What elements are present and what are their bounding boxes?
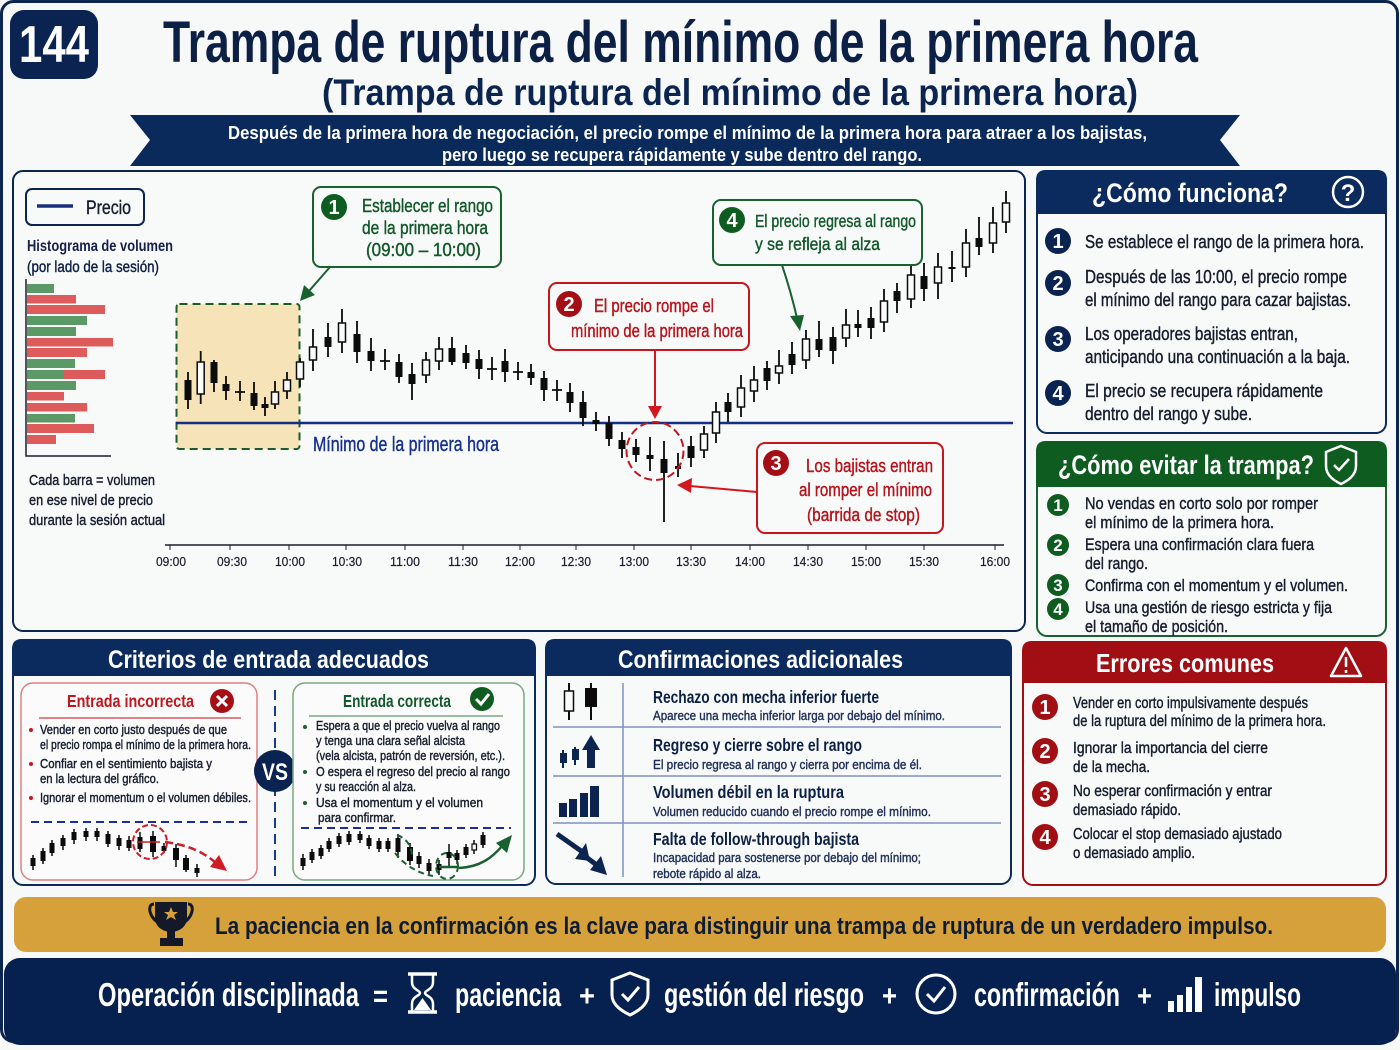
step 2 [1045, 267, 1351, 310]
time axis: 14:00 [735, 554, 765, 569]
volume histogram heading: Histograma de volumen [27, 238, 173, 255]
card heading [309, 687, 503, 716]
card heading: Entrada correcta [343, 691, 451, 711]
callout 1: de la primera hora [362, 218, 489, 238]
bullet list: Vender en corto justo después de que [40, 722, 227, 737]
callout 2: mínimo de la primera hora [571, 321, 744, 341]
footer formula: impulso [1214, 976, 1301, 1013]
tip 2 [1047, 534, 1315, 573]
callout 2: 2 [563, 294, 575, 316]
step 2: el mínimo del rango para cazar bajistas. [1085, 290, 1351, 310]
subtitle: (Trampa de ruptura del mínimo de la primera hora) [322, 71, 1138, 113]
bullet list: y tenga una clara señal alcista [316, 733, 466, 748]
tip 2: 2 [1053, 536, 1063, 555]
time axis: 13:30 [676, 554, 706, 569]
callout 2: El precio rompe el [594, 296, 714, 316]
histogram note [29, 472, 165, 529]
footer formula: + [882, 980, 897, 1013]
mistake 1: Vender en corto impulsivamente después [1073, 695, 1308, 712]
callout 1: Establecer el rango [362, 196, 493, 216]
icon: falling arrow [557, 834, 607, 875]
arrow: callout 4 to rebound [782, 265, 804, 331]
arrow: callout 2 to low line [648, 350, 662, 419]
header: Errores comunes [1096, 648, 1274, 678]
bullet list: Espera a que el precio vuelva al rango [316, 718, 500, 733]
tip 1: No vendas en corto solo por romper [1085, 495, 1318, 513]
callout 4: 4 [726, 210, 738, 232]
step 3: 3 [1052, 329, 1064, 351]
step 1: 1 [1052, 231, 1064, 253]
time axis: 10:00 [275, 554, 305, 569]
header [1022, 641, 1387, 683]
legend: Precio [86, 198, 131, 219]
card: incorrect entry [21, 683, 257, 880]
time axis: 12:00 [505, 554, 535, 569]
header: ¿Cómo funciona? [1092, 178, 1288, 208]
tip 1 [1047, 494, 1318, 532]
row: weak volume: Volumen reducido cuando el precio rompe el mínimo. [653, 804, 931, 819]
badge: 144: 144 [19, 16, 89, 74]
row: lower wick rejection: Aparece una mecha inferior larga por debajo del mínimo. [653, 708, 945, 723]
bullet list: Ignorar el momentum o el volumen débiles. [40, 790, 251, 805]
tip 4: 4 [1053, 600, 1063, 619]
bullet list [303, 718, 510, 825]
legend [26, 189, 144, 225]
step 4: El precio se recupera rápidamente [1085, 381, 1323, 401]
callout 2 [549, 283, 749, 350]
tip 1: el mínimo de la primera hora. [1085, 514, 1274, 532]
mini chart: confirmed entry [300, 828, 512, 879]
mistake 1: de la ruptura del mínimo de la primera hora. [1073, 713, 1326, 730]
callout 3: al romper el mínimo [799, 480, 932, 500]
header: Confirmaciones adicionales [618, 646, 903, 674]
banner [130, 115, 1240, 166]
icon: hourglass [408, 974, 437, 1012]
step 4: 4 [1052, 383, 1064, 405]
panel: common mistakes [1022, 641, 1387, 885]
row: return and close: Regreso y cierre sobre el rango [653, 735, 862, 755]
step 4 [1045, 380, 1323, 424]
bullet list: para confirmar. [318, 810, 396, 825]
panel: how to avoid the trap [1036, 441, 1387, 636]
row: return and close [560, 735, 922, 772]
time axis: 09:30 [217, 554, 247, 569]
bullet list: Usa el momentum y el volumen [316, 795, 483, 810]
banner: pero luego se recupera rápidamente y sube dentro del rango. [442, 145, 922, 165]
mistake 2 [1032, 738, 1268, 776]
arrow: callout 3 to trap [677, 478, 757, 493]
icon: bars [1168, 977, 1202, 1012]
footer formula: + [579, 980, 595, 1013]
time axis: 13:00 [619, 554, 649, 569]
card heading [39, 689, 241, 718]
volume histogram heading: (por lado de la sesión) [27, 259, 159, 276]
mistake 4: Colocar el stop demasiado ajustado [1073, 826, 1282, 843]
banner: Después de la primera hora de negociación, el precio rompe el mínimo de la primera hora para atraer a los bajistas, [228, 123, 1147, 143]
step 4: dentro del rango y sube. [1085, 404, 1252, 424]
callout 4 [713, 200, 922, 265]
icon: candles [564, 683, 597, 720]
mistake 4 [1032, 824, 1282, 862]
mistake 2: Ignorar la importancia del cierre [1073, 740, 1268, 757]
time axis: 14:30 [793, 554, 823, 569]
mistake 3 [1032, 781, 1272, 819]
row: weak volume [559, 782, 931, 819]
volume histogram [26, 279, 113, 456]
card heading: Entrada incorrecta [67, 691, 194, 711]
callout 1: (09:00 – 10:00) [366, 240, 481, 260]
candlesticks [184, 191, 1010, 522]
footer formula: Operación disciplinada [98, 976, 359, 1013]
step 3 [1045, 324, 1350, 367]
volume histogram heading [27, 238, 173, 276]
time axis [156, 545, 1010, 569]
row: lower wick rejection: Rechazo con mecha inferior fuerte [653, 687, 879, 707]
first hour range box [176, 304, 300, 449]
card: correct entry [293, 683, 524, 880]
callout 3: Los bajistas entran [806, 456, 933, 476]
footer formula: = [373, 980, 388, 1013]
step 3: anticipando una continuación a la baja. [1085, 347, 1350, 367]
bullet list: y su reacción al alza. [316, 779, 416, 794]
divider and VS badge: VS [262, 759, 288, 786]
histogram note: en ese nivel de precio [29, 492, 153, 509]
tip 3: Confirma con el momentum y el volumen. [1085, 577, 1348, 595]
mistake 2: 2 [1039, 741, 1051, 763]
header: ¿Cómo evitar la trampa? [1058, 450, 1314, 480]
row: no follow-through: Falta de follow-through bajista [653, 829, 859, 849]
tip 2: Espera una confirmación clara fuera [1085, 536, 1315, 554]
callout 3: (barrida de stop) [807, 505, 920, 525]
mistake 1: 1 [1039, 697, 1051, 719]
callout 3: 3 [770, 453, 782, 475]
callout 1 [313, 187, 501, 267]
tip 2: del rango. [1085, 555, 1148, 573]
time axis: 15:30 [909, 554, 939, 569]
panel: entry criteria [12, 639, 536, 885]
tip 3: 3 [1053, 576, 1063, 595]
bullet list: (vela alcista, patrón de reversión, etc.). [316, 748, 505, 763]
time axis: 12:30 [561, 554, 591, 569]
tip 1: 1 [1053, 496, 1063, 515]
row: return and close: El precio regresa al rango y cierra por encima de él. [653, 757, 922, 772]
first hour low line [176, 422, 1013, 424]
bullet list: Confiar en el sentimiento bajista y [40, 756, 212, 771]
callout 4: El precio regresa al rango [755, 211, 916, 231]
mistake 3: 3 [1039, 784, 1051, 806]
row: no follow-through [557, 829, 921, 881]
panel: additional confirmations [545, 639, 1012, 884]
header [1036, 170, 1387, 214]
step 2: Después de las 10:00, el precio rompe [1085, 267, 1347, 287]
time axis: 11:00 [390, 554, 420, 569]
row: lower wick rejection [564, 683, 945, 723]
icon: candles and up arrow [560, 735, 600, 768]
tip 4 [1047, 598, 1333, 636]
time axis: 16:00 [980, 554, 1010, 569]
row: weak volume: Volumen débil en la ruptura [653, 782, 844, 802]
tip 4: Usa una gestión de riesgo estricta y fija [1085, 599, 1333, 617]
bullet list: en la lectura del gráfico. [40, 771, 159, 786]
mistake 2: de la mecha. [1073, 759, 1150, 776]
divider and VS badge [254, 690, 296, 880]
icon: trophy [150, 902, 192, 946]
tip 3 [1047, 574, 1348, 596]
mistake 4: o demasiado amplio. [1073, 845, 1195, 862]
mistake 1 [1032, 694, 1326, 730]
mistake 4: 4 [1039, 827, 1051, 849]
icon: volume bars [559, 786, 599, 817]
mistake 3: demasiado rápido. [1073, 802, 1181, 819]
footer formula: gestión del riesgo [664, 976, 864, 1013]
bullet list: el precio rompa el mínimo de la primera hora. [40, 737, 251, 752]
panel: how it works [1036, 170, 1387, 433]
takeaway banner [14, 897, 1386, 952]
mini chart: failed entry [30, 822, 247, 877]
tip 4: el tamaño de posición. [1085, 618, 1228, 636]
callout 4: y se refleja al alza [755, 234, 880, 254]
header [545, 639, 1012, 676]
icon: check circle [917, 975, 955, 1013]
header: ? [1341, 180, 1355, 207]
header [12, 639, 536, 676]
time axis: 11:30 [448, 554, 478, 569]
arrow: callout 1 to range [300, 267, 330, 301]
row: no follow-through: rebote rápido al alza. [653, 866, 761, 881]
bullet list: O espera el regreso del precio al rango [316, 764, 510, 779]
time axis: 09:00 [156, 554, 186, 569]
histogram note: Cada barra = volumen [29, 472, 155, 489]
mistake 3: No esperar confirmación y entrar [1073, 783, 1272, 800]
trap zone dashed circle [626, 422, 684, 480]
step 1 [1045, 228, 1364, 254]
histogram note: durante la sesión actual [29, 512, 165, 529]
footer formula: confirmación [974, 976, 1120, 1013]
first hour low label: Mínimo de la primera hora [313, 434, 500, 456]
callout 3 [757, 443, 943, 533]
icon: shield [612, 973, 648, 1015]
step 3: Los operadores bajistas entran, [1085, 324, 1298, 344]
footer formula [4, 958, 1396, 1045]
footer formula: + [1137, 980, 1152, 1013]
panel: price chart [13, 171, 1025, 631]
footer formula: paciencia [455, 976, 561, 1013]
header: Criterios de entrada adecuados [108, 646, 429, 674]
time axis: 10:30 [332, 554, 362, 569]
bullet list [29, 722, 251, 805]
callout 1: 1 [328, 197, 340, 219]
step 2: 2 [1052, 273, 1064, 295]
time axis: 15:00 [851, 554, 881, 569]
header [1036, 441, 1387, 487]
row: no follow-through: Incapacidad para sostenerse por debajo del mínimo; [653, 850, 921, 865]
